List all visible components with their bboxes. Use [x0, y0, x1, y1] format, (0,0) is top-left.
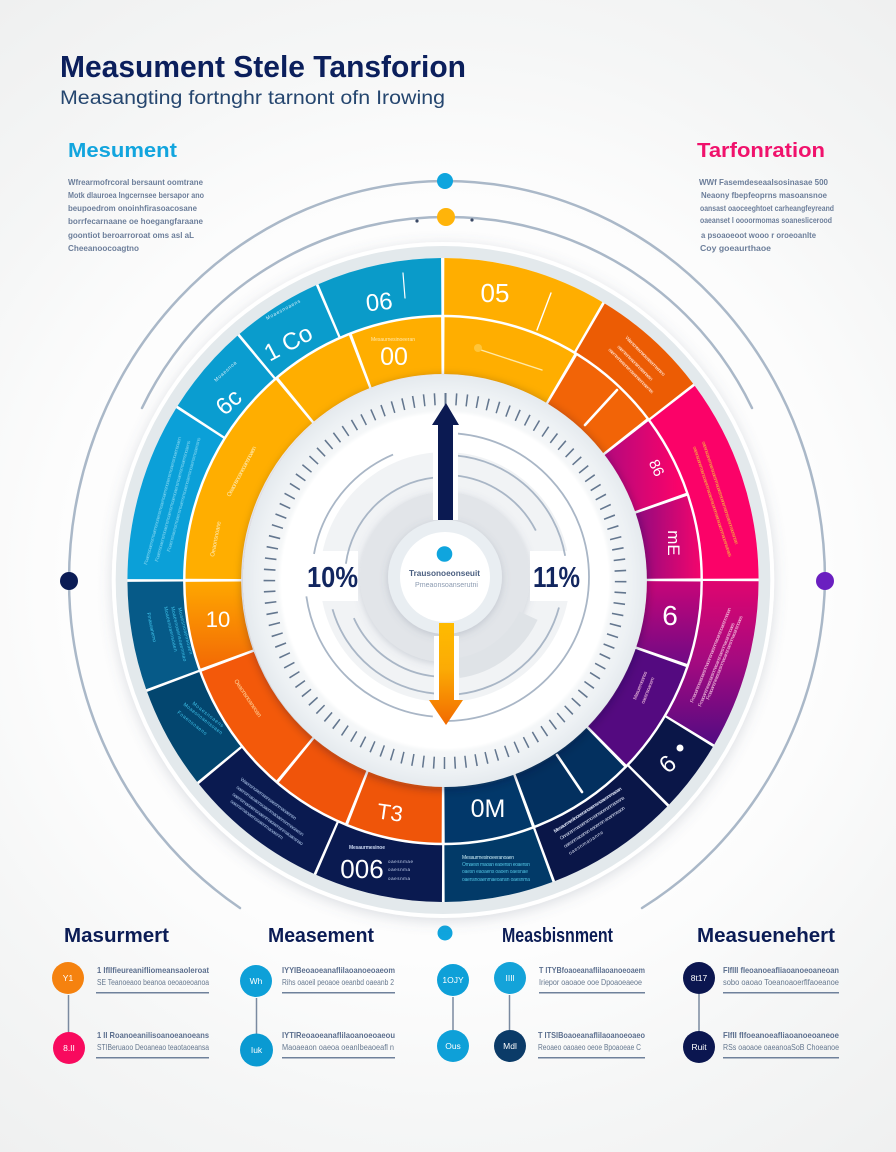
legend badge: blue 2: Iuk: [251, 1045, 263, 1055]
orbit marker: top blue dot: [437, 173, 453, 189]
legend row 3b: Reoaeo oaoaeo oeoe Bpoaoeae C: [538, 1043, 641, 1052]
segment captions: tiny text: oaesn eaoaens oaoen oaesnae: [462, 869, 528, 875]
segment captions: tiny text: Moaesnoaens: [191, 701, 225, 729]
orbit marker: bottom blue dot: [438, 926, 452, 940]
legend row 3b: T ITSIBoaoeanaflilaoanoeoaeo: [538, 1030, 645, 1040]
wheel segments: outer band: [156, 287, 730, 873]
legend badge: blue 3a lower: Ous: [445, 1041, 461, 1051]
legend badge: navy 4a: 8t17: [691, 973, 708, 983]
segment captions: tiny text: oaensmaoaensoaenmaoaenm: [229, 799, 284, 841]
center hub: [388, 520, 502, 634]
segment captions: tiny text: oaemesnseaonsrnoseanaesn: [616, 344, 654, 383]
legend row 1b: 1 II Roanoeanilisoanoeanoeans: [97, 1030, 209, 1040]
segment captions: tiny text: Moaesnoaensoaenmao: [169, 606, 188, 662]
legend badge: pink: [53, 1032, 85, 1064]
segment captions: tiny text: Fmaoansneasoaesnmaoansnaesnmaoansnoaesnmaoan: [689, 607, 733, 704]
segment captions: tiny text: Moaesnoaensoaen: [182, 702, 223, 736]
dial face: [243, 375, 647, 787]
legend row 4b: RSs oaoaoe oaeanoaSoB Choeanoe: [723, 1043, 839, 1052]
legend row 1a: [96, 965, 209, 994]
segment labels: numbers: 006: [340, 854, 384, 884]
segment labels: numbers: mE: [664, 530, 683, 556]
legend row 4b: [723, 1030, 839, 1058]
legend connector 2: [256, 998, 258, 1034]
legend badge: blue 3b: [494, 962, 526, 994]
legend row 2b: [282, 1030, 395, 1058]
legend heading 2: Measement: [268, 925, 374, 947]
text block: transformation description: Neaony fbepfeoprns masoansnoe: [701, 190, 827, 200]
segment captions: tiny text: Oeaonsnoaneoansnoaen: [226, 446, 258, 498]
legend connector 3b: [508, 995, 510, 1030]
legend row 1a: 1 IfIIfieureanifliomeansaoleroat: [97, 965, 209, 975]
segment captions: tiny text: Fmasoanemo: [145, 612, 157, 643]
legend badge: teal 3b: [494, 1030, 526, 1062]
segment labels: numbers: [206, 278, 684, 884]
segment captions: tiny text: Oeaonsnoane: [210, 520, 223, 557]
segment captions: tiny text: Moaesnoa: [213, 360, 238, 383]
segment accents: white strokes: [403, 273, 617, 792]
segment labels: numbers: 86: [645, 457, 667, 479]
legend row 4b: FIfII fIfoeanoeafliaoanoeoaneoe: [723, 1030, 839, 1040]
dial thin arcs: [301, 433, 589, 721]
legend badge: navy 4a: [683, 962, 715, 994]
hub sublabel: Pmeaonsoanserutni: [415, 580, 478, 589]
text block: measurement description: beupoedrom onoinhfirasoacosane: [68, 203, 197, 213]
segment labels: numbers: 05: [481, 278, 509, 308]
segment captions: tiny text: Fmaoansneasoaesnmaoansnaesnmaoansnoaes: [705, 615, 745, 701]
segment labels: numbers: 1 Co: [260, 320, 317, 367]
legend badge: blue 3a: 1OJY: [442, 975, 464, 985]
text block: measurement description: goontiot beroarroroat oms asl aL: [68, 230, 194, 240]
text block: transformation description: Coy goeaurthaoe: [700, 243, 771, 253]
segment labels: numbers: 06: [365, 288, 394, 317]
legend row 3a: [539, 965, 645, 994]
segment labels: numbers: 6: [654, 750, 682, 779]
segment captions: tiny text: oaesnsoanemasnsoaesnmaoaesnsoanemasnsoaesnmaoesnsan: [700, 441, 739, 546]
segment captions: tiny text: Foaensoaensmoaensnoaensmoaenoaensnoaensmoaensnoaensoaen: [143, 436, 183, 566]
segment labels: numbers: T3: [376, 798, 405, 827]
legend connector 1: [68, 995, 70, 1034]
legend badge: blue 2: [240, 1034, 273, 1066]
segment captions: tiny text: oaesnmaoanne: [568, 830, 605, 857]
panel: legend column 2: [240, 925, 395, 1066]
panel: transformation intro: [697, 139, 834, 253]
legend row 4a: sobo oaoao Toeanoaoerflfaoeanoe: [723, 978, 840, 987]
legend connector 3a: [452, 997, 454, 1030]
segment captions: tiny text: oaesnsoanemasnsoaesnmaoaesnsoanemasnsoaesnmaoesnsanaes: [691, 446, 733, 558]
segment captions: tiny text: Waansonreaonsrosoaesanmeansno: [624, 335, 666, 378]
title: Measument Stele Tansforion: [60, 49, 466, 84]
central dial: [243, 375, 647, 787]
segment captions: tiny text: Foaensoaensmoaensnoaensmoaenoaensnoaensmoaensnoaens: [154, 440, 192, 563]
segment captions: tiny text: oaesnsoanem: [640, 677, 656, 705]
wheel rim: [112, 242, 774, 918]
legend row 3b: [538, 1030, 645, 1058]
legend row 4a: FIfIII fIeoanoeafliaoanoeoaneoan: [723, 965, 839, 975]
segment captions: tiny text: oaensmaoaensoaenmaoaensnmaoaesnao: [231, 792, 304, 847]
segment captions: tiny text: Foaensoaensmoaensnoaensmoaenoaensnoaensmoaensno: [166, 437, 203, 553]
segment captions: tiny text: Moaesnoaensoaen: [176, 607, 194, 655]
outer orbit arc: [69, 181, 825, 908]
legend row 1b: [96, 1030, 209, 1058]
legend row 1a: SE Teanoeaoo beanoa oeoaoeoanoa: [97, 978, 209, 987]
text block: measurement description: borrfecarnaane oe hoegangfaraane: [68, 216, 203, 226]
legend badge: navy 4b: [683, 1031, 715, 1063]
inner orbit arc: [142, 217, 752, 408]
legend row 4a: [723, 965, 840, 994]
legend row 2a: [282, 965, 395, 994]
panel: legend column 3: [437, 925, 645, 1062]
white gaps behind percentages: [304, 551, 586, 601]
legend row 2a: IYYIBeoaoeanaflilaoanoeoaeom: [282, 965, 395, 975]
legend row 2b: Maoaeaon oaeoa oeanIbeaoeafl n: [282, 1043, 394, 1052]
right percentage: 11%: [533, 562, 580, 594]
segment captions: tiny text: Mesaurnesinoeeran: [371, 337, 415, 343]
text block: measurement description: [68, 177, 204, 253]
legend row 3a: Iriepor oaoaoe ooe Dpoaoeaeoe: [539, 978, 642, 987]
orbit marker: yellow dot: [415, 208, 474, 226]
segment captions: tiny text: Moaesnoaensoaen: [162, 606, 178, 652]
orbit marker: left navy dot: [60, 572, 78, 590]
segment captions: tiny text: Moaesnoaens: [265, 298, 302, 322]
segment captions: tiny text: oaesnma: [388, 867, 410, 872]
legend connector 4: [698, 994, 700, 1032]
hub blue dot: [437, 546, 452, 562]
segment captions: tiny text: oaesnmae: [388, 859, 413, 864]
legend badge: blue 3b: IIIl: [506, 973, 515, 983]
legend badge: blue: Wh: [250, 976, 263, 986]
segment captions: tiny text: oaesnma: [388, 876, 410, 881]
text block: measurement description: Cheeanoocoagtno: [68, 243, 139, 253]
wheel segments: inner band: [184, 316, 702, 844]
segment labels: numbers: 10: [206, 607, 230, 632]
legend badge: teal 3b: Mdl: [503, 1041, 517, 1051]
segment labels: numbers: 6: [662, 600, 678, 631]
segment captions: tiny text: oaemesnseaonsrnoseanaesnoaemes: [607, 347, 655, 396]
segment labels: numbers: 00: [380, 343, 408, 371]
up arrow: navy: [432, 403, 459, 520]
segment captions: tiny text: Omaesn maoan eaoensn eoaensn: [462, 862, 530, 868]
hub label: Trausonoeonseuit: [409, 568, 480, 578]
text block: transformation description: WWf Fasemdeseaalsosinasae 500: [699, 177, 828, 187]
legend badge: navy 4b: Ruit: [691, 1042, 707, 1052]
legend heading 4: Measuenehert: [697, 925, 835, 947]
orbit marker: right purple dot: [816, 572, 834, 590]
legend badge: orange: Y1: [63, 973, 73, 983]
segment captions: tiny text: Oeaonsnoaneoan: [232, 679, 262, 719]
left percentage: 10%: [307, 562, 358, 594]
legend heading 3: Measbisnment: [502, 925, 613, 947]
dial tick marks: [269, 399, 621, 763]
segment captions: tiny text: Foaensoaeno: [176, 710, 208, 737]
text block: measurement description: Wfrearmofrcoral bersaunt oomtrane: [68, 177, 203, 187]
legend badge: orange: [52, 962, 84, 994]
segment captions: tiny text: Mesaurmesinoeeranoaen: [462, 855, 514, 861]
text block: transformation description: a psoaoeoot wooo r oroeoanlte: [701, 230, 816, 240]
segment captions: tiny text: oaensnoaenmaeoansn oaesnma: [462, 877, 530, 883]
segment captions: tiny text: Masuremeanos: [632, 670, 649, 701]
heading: measurement: Mesument: [68, 139, 177, 162]
legend row 2b: IYTIReoaoeanaflilaoanoeoaeou: [282, 1030, 395, 1040]
legend heading 1: Masurmert: [64, 925, 169, 947]
down arrow: amber: [429, 623, 463, 725]
legend badge: blue: [240, 965, 272, 997]
segment labels: numbers: 0M: [471, 795, 505, 823]
segment captions: tiny text: oaensmaoaensoaenmaoaensnmaoaesn: [235, 785, 305, 838]
legend row 2a: Rihs oaoeil peoaoe oeanbd oaeanb 2: [282, 978, 394, 987]
legend badge: blue 3a: [437, 964, 469, 996]
legend badge: pink: 8.II: [63, 1043, 75, 1053]
text block: measurement description: Motk dlauroea Ingcernsee bersapor ano: [68, 190, 204, 200]
segment captions: tiny text: Mesaurmesinoeeranoaensnoaesnmaoan: [553, 786, 623, 835]
legend row 3a: T ITYBfoaoeanaflilaoanoeoaem: [539, 965, 645, 975]
heading: transformation: Tarfonration: [697, 139, 825, 162]
text block: transformation description: oansast oaoceeghtoet carheangfeyreand: [700, 203, 834, 213]
subtitle: Measangting fortnghr tarnont ofn Irowing: [60, 88, 445, 109]
legend badge: blue 3a lower: [437, 1030, 469, 1062]
panel: legend column 1: [52, 925, 209, 1064]
segment captions: tiny text: Waensnoaemasnoaesnmaoaensn: [239, 777, 298, 822]
segment labels: numbers: 6c: [211, 384, 247, 421]
panel: measurement intro: [68, 139, 204, 253]
segment captions: tiny text: Fmaoansneasoaesnmaoansnaesnmaoansnoaes: [697, 622, 737, 708]
segment captions: tiny text: [143, 298, 745, 883]
segment captions: tiny text: Mesaurmesinoe: [349, 845, 385, 851]
segment captions: tiny text: Onnaosn maoaensmo eansaoensnmaoesna: [559, 795, 626, 842]
panel: legend column 4: [683, 925, 840, 1063]
text block: transformation description: [699, 177, 834, 253]
radial segmented wheel: [112, 242, 774, 918]
legend row 1b: STIBeruaoo Deoaneao teaotaoeansa: [97, 1043, 209, 1052]
segment captions: tiny text: oaesnmaoansn eaoensn aoanmeaon: [563, 805, 627, 850]
text block: transformation description: oaeanset I oooormomas soaneslicerood: [700, 215, 832, 225]
dial concentric bands: [320, 452, 570, 702]
